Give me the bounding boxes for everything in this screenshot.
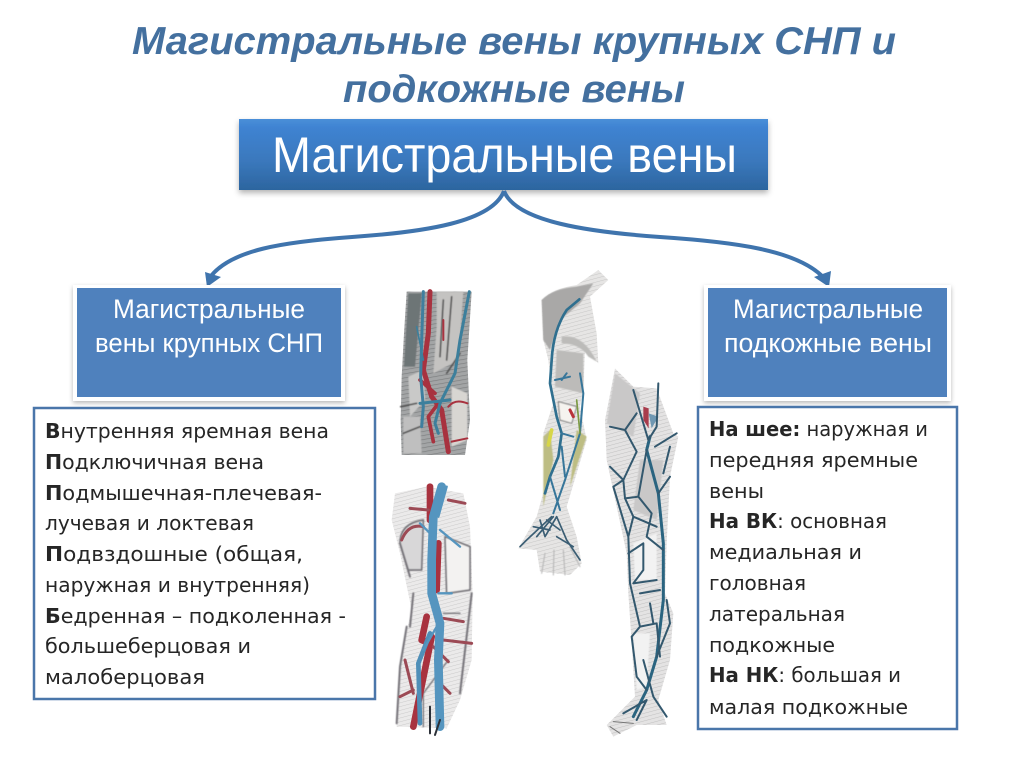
illustration: elbow deep veins — [401, 292, 472, 455]
panel: subcutaneous veins list: передняя яремные — [709, 448, 918, 472]
panel: subcutaneous veins list: На ВК: основная — [709, 509, 887, 533]
panel: subcutaneous veins list: латеральная — [709, 602, 845, 626]
panel: deep veins list: Внутренняя яремная вена — [45, 419, 329, 443]
panel: deep veins list: лучевая и локтевая — [45, 511, 254, 535]
panel: subcutaneous veins list: малая подкожные — [709, 695, 908, 719]
title: Магистральные вены крупных СНП и — [132, 20, 896, 63]
panel: deep veins list: Бедренная – подколенная - — [45, 604, 346, 628]
panel: deep veins list: малоберцовая — [45, 665, 205, 689]
box: subcutaneous veins heading — [704, 285, 951, 401]
illustrations: anatomy drawings — [392, 270, 678, 737]
illustration: arm superficial veins — [518, 270, 608, 575]
illustration: leg superficial veins — [605, 368, 678, 737]
box: subcutaneous veins heading: подкожные вены — [724, 328, 932, 358]
panel: subcutaneous veins list: медиальная и — [709, 540, 862, 564]
panel: subcutaneous veins list: На НК: большая и — [709, 663, 901, 687]
box: subcutaneous veins heading: Магистральные — [733, 294, 923, 324]
title — [132, 20, 896, 111]
box: deep veins heading: вены крупных СНП — [95, 328, 323, 358]
arrow: to left branch — [205, 191, 504, 287]
arrow: to right branch — [504, 191, 831, 287]
title: подкожные вены — [343, 68, 685, 111]
top box: Магистральные вены: Магистральные вены — [272, 127, 737, 183]
box: deep veins heading — [73, 285, 345, 401]
panel: subcutaneous veins list — [698, 407, 957, 729]
panel: deep veins list: наружная и внутренняя) — [45, 573, 310, 597]
panel: subcutaneous veins list: На шее: наружная и — [709, 417, 928, 441]
panel: deep veins list: большеберцовая и — [45, 634, 251, 658]
panel: subcutaneous veins list: головная — [709, 571, 806, 595]
panel: subcutaneous veins list: подкожные — [709, 633, 835, 657]
panel: deep veins list: Подвздошные (общая, — [45, 542, 303, 566]
panel: deep veins list: Подключичная вена — [45, 450, 264, 474]
panel: deep veins list: Подмышечная-плечевая- — [45, 481, 322, 505]
panel: subcutaneous veins list: вены — [709, 479, 764, 503]
panel: deep veins list — [34, 408, 375, 699]
box: deep veins heading: Магистральные — [113, 294, 305, 324]
illustration: thigh deep veins — [392, 487, 473, 735]
